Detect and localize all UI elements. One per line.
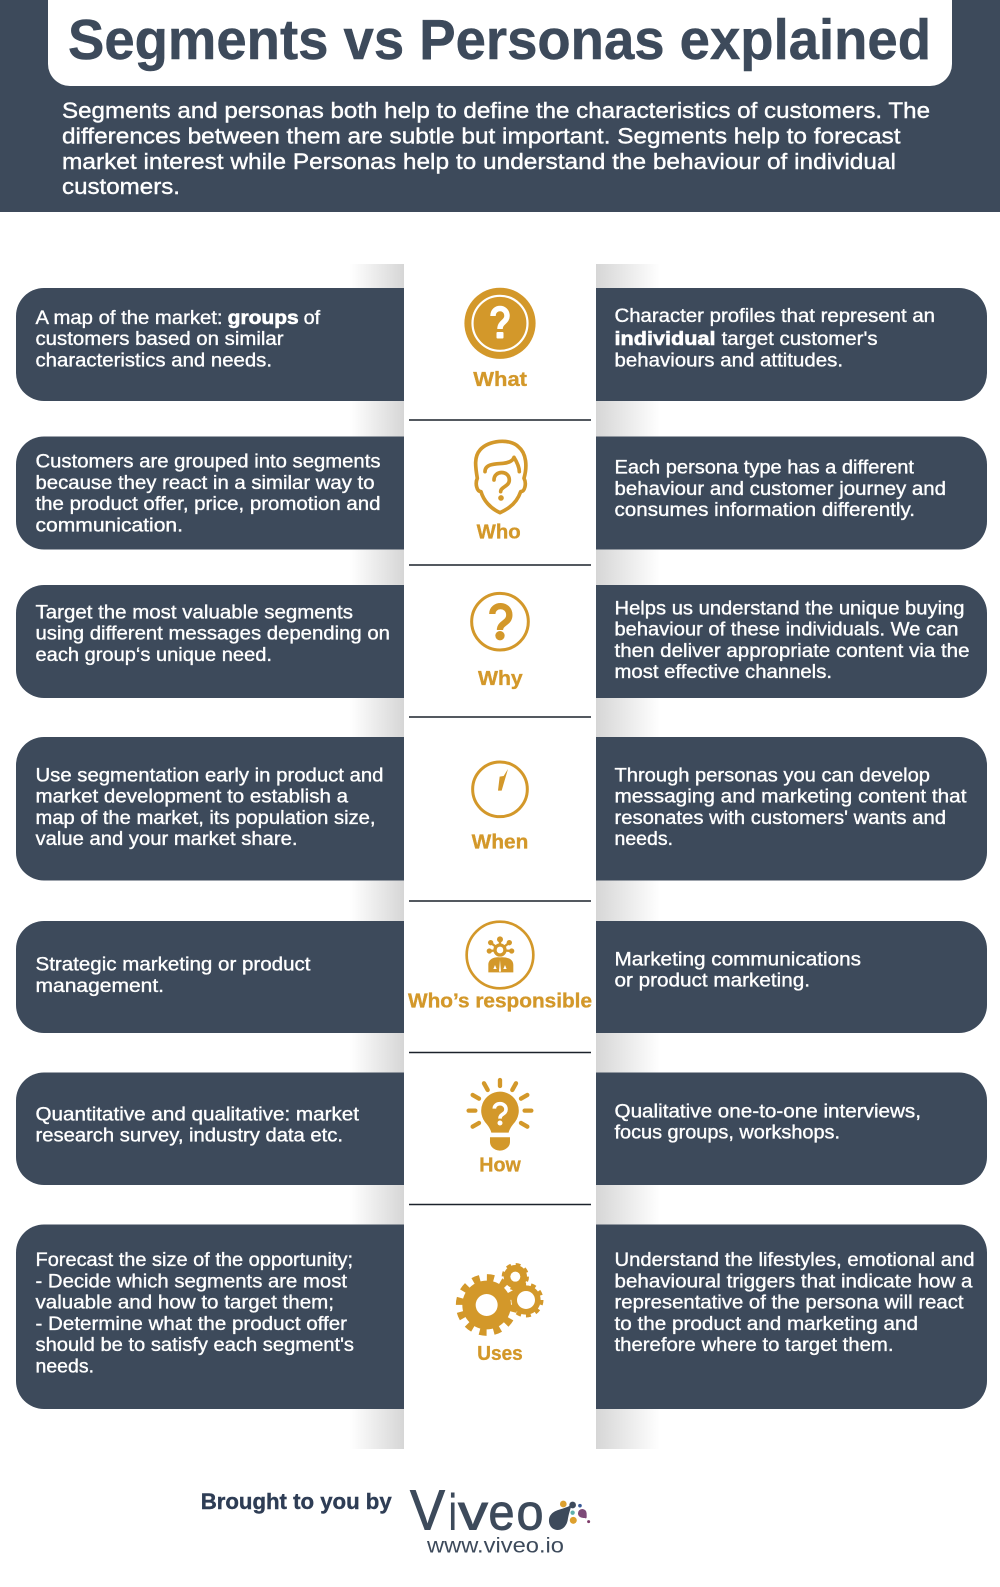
- row: who: [16, 436, 987, 550]
- panel: segments uses: [16, 1224, 404, 1409]
- panel: segments what: groups: [228, 308, 299, 329]
- panel: segments why: using different messages depending on: [36, 624, 390, 645]
- panel: personas why: [596, 585, 987, 698]
- panel: segments uses: should be to satisfy each segment's: [36, 1335, 354, 1356]
- icon: uses: [459, 1265, 542, 1332]
- panel: segments uses: - Decide which segments are most: [36, 1271, 348, 1292]
- footer: brought to you by: Brought to you by: [201, 1489, 392, 1514]
- panel: segments who: because they react in a similar way to: [36, 473, 374, 494]
- label: who: Who: [477, 521, 521, 543]
- row: who's responsible: [16, 921, 987, 1033]
- panel: personas uses: representative of the persona will react: [614, 1293, 964, 1314]
- panel: personas uses: behavioural triggers that indicate how a: [614, 1271, 973, 1292]
- panel: segments who: communication.: [36, 515, 183, 536]
- panel: segments what: A map of the market:: [36, 308, 223, 329]
- logo: Viveo: i: [449, 1484, 456, 1540]
- shadow: left column: [350, 264, 404, 1449]
- panel: personas what: Character profiles that represent an: [614, 306, 935, 327]
- label: when: When: [472, 831, 528, 853]
- logo: Viveo: o: [516, 1484, 544, 1540]
- panel: personas how: Qualitative one-to-one interviews,: [614, 1101, 921, 1122]
- label: uses: Uses: [477, 1343, 523, 1365]
- panel: segments why: Target the most valuable segments: [36, 602, 353, 623]
- row: why: [16, 585, 987, 698]
- panel: segments uses: needs.: [36, 1356, 94, 1377]
- panel: segments how: Quantitative and qualitative: market: [36, 1104, 360, 1125]
- panel: personas responsible: or product marketing.: [614, 971, 810, 992]
- panel: segments when: map of the market, its population size,: [36, 808, 376, 829]
- panel: segments what: of: [304, 308, 321, 329]
- panel: personas when: needs.: [614, 829, 673, 850]
- icon: who: [476, 441, 526, 513]
- icon: what: [464, 288, 536, 359]
- panel: segments why: [16, 585, 404, 698]
- row: what: [16, 288, 987, 401]
- panel: personas what: individual: [614, 329, 716, 350]
- label: how: How: [479, 1155, 521, 1177]
- panel: personas when: Through personas you can develop: [614, 765, 930, 786]
- label: what: What: [473, 369, 527, 391]
- panel: personas what: target customer's: [722, 329, 878, 350]
- label: why: Why: [478, 668, 524, 690]
- panel: segments responsible: management.: [36, 976, 164, 997]
- icon: why: [472, 593, 528, 650]
- panel: personas uses: to the product and marketing and: [614, 1314, 918, 1335]
- logo: Viveo: v: [458, 1484, 488, 1540]
- panel: segments who: the product offer, price, promotion and: [36, 494, 380, 515]
- panel: personas who: [596, 436, 987, 550]
- panel: personas how: [596, 1072, 987, 1185]
- panel: segments what: [16, 288, 404, 401]
- panel: personas why: behaviour of these individuals. We can: [614, 620, 958, 640]
- panel: segments when: value and your market share.: [36, 829, 298, 850]
- panel: segments how: research survey, industry data etc.: [36, 1126, 343, 1147]
- intro text: customers.: [62, 174, 180, 199]
- icon: who's responsible: [467, 922, 533, 988]
- icon: how: [469, 1080, 531, 1151]
- panel: personas what: [596, 288, 987, 401]
- shadow: right column: [596, 264, 660, 1449]
- logo: Viveo: V: [410, 1478, 445, 1542]
- panel: personas uses: therefore where to target them.: [614, 1335, 894, 1356]
- panel: segments who: Customers are grouped into segments: [36, 452, 380, 472]
- row: how: [16, 1072, 987, 1185]
- intro text: differences between them are subtle but important. Segments help to forecast: [62, 124, 901, 148]
- row: when: [16, 737, 987, 880]
- panel: personas what: behaviours and attitudes.: [614, 350, 843, 371]
- panel: personas responsible: [596, 921, 987, 1033]
- row: uses: [16, 1224, 987, 1409]
- panel: segments uses: valuable and how to target them;: [36, 1293, 334, 1314]
- panel: personas responsible: Marketing communications: [614, 950, 861, 970]
- panel: segments what: customers based on similar: [36, 329, 284, 350]
- panel: segments when: market development to establish a: [36, 786, 348, 808]
- panel: segments when: Use segmentation early in product and: [36, 765, 384, 786]
- panel: personas when: resonates with customers' wants and: [614, 808, 946, 829]
- panel: personas uses: Understand the lifestyles, emotional and: [614, 1250, 974, 1271]
- panel: personas who: Each persona type has a different: [614, 458, 915, 479]
- logo: Viveo: e: [488, 1484, 514, 1540]
- panel: segments what: characteristics and needs.: [36, 350, 272, 371]
- panel: segments responsible: Strategic marketing or product: [36, 954, 311, 976]
- logo url: www.viveo.io: [426, 1534, 564, 1558]
- panel: personas why: most effective channels.: [614, 662, 832, 683]
- panel: personas who: consumes information differently.: [614, 500, 915, 521]
- panel: personas why: Helps us understand the unique buying: [614, 598, 964, 619]
- intro text: Segments and personas both help to define the characteristics of customers. The: [62, 98, 930, 123]
- panel: segments when: [16, 737, 404, 880]
- intro text: [62, 98, 930, 199]
- panel: segments how: [16, 1072, 404, 1185]
- panel: personas uses: [596, 1224, 987, 1409]
- title box: [48, 0, 952, 86]
- intro text: market interest while Personas help to understand the behaviour of individual: [62, 149, 896, 174]
- label: who's responsible: Who’s responsible: [408, 990, 592, 1012]
- centre column: [404, 264, 596, 1449]
- panel: segments who: [16, 436, 404, 550]
- panel: personas when: [596, 737, 987, 880]
- panel: segments why: each group‘s unique need.: [36, 645, 272, 666]
- panel: segments uses: Forecast the size of the opportunity;: [36, 1250, 353, 1271]
- panel: segments uses: - Determine what the product offer: [36, 1314, 348, 1335]
- panel: personas why: then deliver appropriate content via the: [614, 641, 970, 662]
- panel: personas who: behaviour and customer journey and: [614, 479, 946, 500]
- icon: when: [473, 762, 527, 817]
- logo mark: [549, 1501, 590, 1530]
- title: Segments vs Personas explained: [68, 8, 931, 72]
- logo: Viveo: [410, 1478, 590, 1558]
- panel: personas how: focus groups, workshops.: [614, 1122, 840, 1144]
- header band: [0, 0, 1000, 212]
- panel: personas when: messaging and marketing content that: [614, 786, 967, 808]
- panel: segments responsible: [16, 921, 404, 1033]
